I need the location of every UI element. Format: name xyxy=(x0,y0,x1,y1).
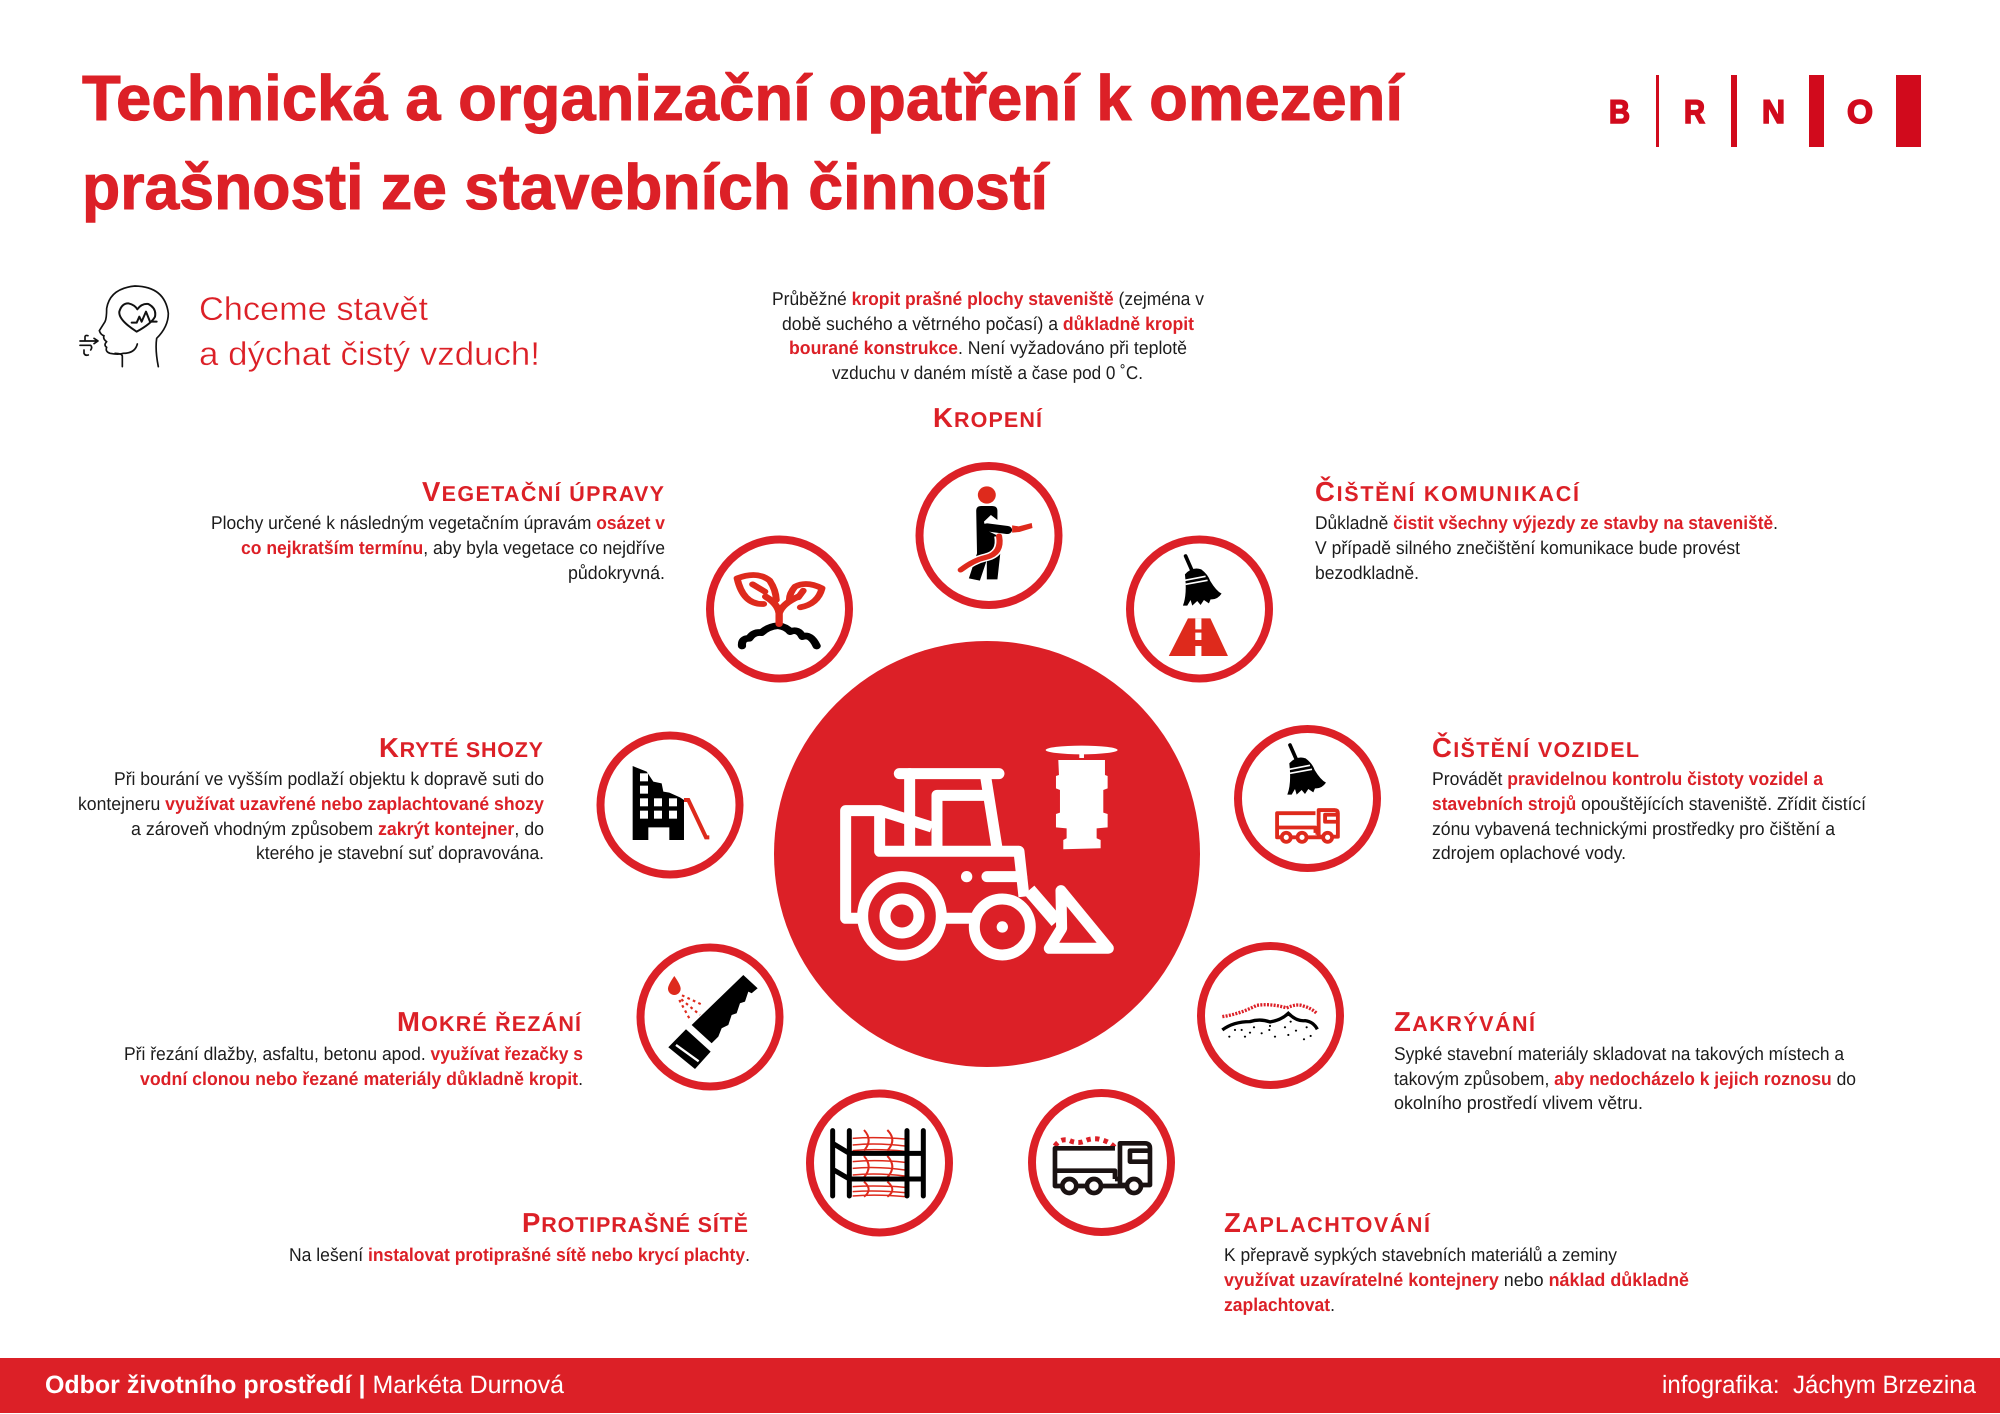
body text xyxy=(78,768,545,863)
heading: ZAKRÝVÁNÍ xyxy=(1394,1006,1536,1037)
body text: kterého je stavební suť dopravována. xyxy=(256,842,544,863)
body text xyxy=(1315,512,1778,583)
body text xyxy=(1394,1043,1856,1113)
panel: vegetační úpravy xyxy=(211,476,849,678)
footer: author: Odbor životního prostředí | Markéta Durnová xyxy=(45,1371,564,1399)
logo: Brno: O xyxy=(1847,93,1873,130)
icon: covered pile xyxy=(1201,946,1340,1085)
body text xyxy=(1224,1244,1689,1315)
icon: dust extractor xyxy=(1046,746,1118,849)
icon: broom and truck xyxy=(1238,729,1377,868)
body text: době suchého a větrného počasí) a důkladně kropit xyxy=(782,313,1194,334)
heading: ČIŠTĚNÍ KOMUNIKACÍ xyxy=(1315,476,1580,507)
body text xyxy=(1432,768,1867,863)
body text: vzduchu v daném místě a čase pod 0 ˚C. xyxy=(832,362,1143,383)
panel: zaplachtování xyxy=(1032,1093,1689,1315)
body text: Při bourání ve vyšším podlaží objektu k dopravě suti do xyxy=(114,768,544,789)
body text: zdrojem oplachové vody. xyxy=(1432,842,1626,863)
heading: KROPENÍ xyxy=(933,402,1043,433)
heading: MOKRÉ ŘEZÁNÍ xyxy=(397,1006,582,1037)
body text: Průběžné kropit prašné plochy staveniště (zejména v xyxy=(772,288,1205,309)
body text xyxy=(124,1043,583,1089)
body text: Na lešení instalovat protiprašné sítě nebo krycí plachty. xyxy=(289,1244,750,1265)
icon: building with chute xyxy=(600,736,740,874)
body text: Provádět pravidelnou kontrolu čistoty vozidel a xyxy=(1432,768,1824,789)
heading: ČIŠTĚNÍ VOZIDEL xyxy=(1432,732,1639,763)
body text xyxy=(772,288,1205,383)
panel: čištění vozidel xyxy=(1238,729,1867,868)
body text: Důkladně čistit všechny výjezdy ze stavby na staveniště. xyxy=(1315,512,1778,533)
title: prašnosti ze stavebních činností xyxy=(82,151,1050,223)
icon: seedling xyxy=(710,540,849,678)
panel: protiprašné sítě xyxy=(289,1094,949,1265)
body text xyxy=(211,512,666,583)
body text: co nejkratším termínu, aby byla vegetace co nejdříve xyxy=(241,537,665,558)
footer: credit: infografika: Jáchym Brzezina xyxy=(1662,1371,1976,1399)
body text: využívat uzavíratelné kontejnery nebo náklad důkladně xyxy=(1224,1269,1689,1290)
tagline: Chceme stavět xyxy=(199,290,428,327)
body text: Při řezání dlažby, asfaltu, betonu apod. využívat řezačky s xyxy=(124,1043,583,1064)
heading: PROTIPRAŠNÉ SÍTĚ xyxy=(522,1207,748,1238)
body text: bezodkladně. xyxy=(1315,562,1419,583)
body text: takovým způsobem, aby nedocházelo k jejich roznosu do xyxy=(1394,1068,1856,1089)
icon: scaffold with net xyxy=(810,1094,949,1232)
body text: vodní clonou nebo řezané materiály důkladně kropit. xyxy=(140,1068,583,1089)
logo: Brno: R xyxy=(1684,93,1705,130)
body text: půdokryvná. xyxy=(568,562,665,583)
tagline xyxy=(199,290,540,372)
body text: zónu vybavená technickými prostředky pro čištění a xyxy=(1432,818,1836,839)
heading: KRYTÉ SHOZY xyxy=(379,732,543,763)
body text: okolního prostředí vlivem větru. xyxy=(1394,1092,1643,1113)
body text: stavebních strojů opouštějících staveniště. Zřídit čistící xyxy=(1432,793,1867,814)
body text: kontejneru využívat uzavřené nebo zaplachtované shozy xyxy=(78,793,545,814)
footer bar xyxy=(0,1358,2000,1413)
title: Technická a organizační opatření k omezení xyxy=(82,62,1405,134)
body text: zaplachtovat. xyxy=(1224,1294,1335,1315)
heading: VEGETAČNÍ ÚPRAVY xyxy=(422,476,664,507)
body text: bourané konstrukce. Není vyžadováno při teplotě xyxy=(789,337,1187,358)
panel: kropení xyxy=(772,288,1205,605)
tagline: a dýchat čistý vzduch! xyxy=(199,335,540,372)
panel: čištění komunikací xyxy=(1130,476,1778,678)
heading: ZAPLACHTOVÁNÍ xyxy=(1224,1207,1431,1238)
body text: V případě silného znečištění komunikace bude provést xyxy=(1315,537,1740,558)
logo: Brno xyxy=(1609,75,1921,147)
logo: Brno: B xyxy=(1609,93,1630,130)
logo: Brno: N xyxy=(1762,93,1785,130)
body text: Plochy určené k následným vegetačním úpravám osázet v xyxy=(211,512,666,533)
body text: a zároveň vhodným způsobem zakrýt kontejner, do xyxy=(131,818,544,839)
icon: person with hose xyxy=(920,466,1058,605)
icon: broom and road xyxy=(1130,540,1269,678)
panel: zakrývání xyxy=(1201,946,1856,1113)
icon: wet saw xyxy=(640,948,780,1086)
icon: head with heart and breath xyxy=(80,286,168,367)
title xyxy=(82,62,1405,223)
icon: covered truck xyxy=(1032,1093,1171,1232)
panel: mokré řezání xyxy=(124,948,780,1089)
body text: Sypké stavební materiály skladovat na takových místech a xyxy=(1394,1043,1845,1064)
central circle with loader icon xyxy=(774,641,1200,1067)
icon: loader xyxy=(846,774,1108,955)
panel: kryté shozy xyxy=(78,732,740,874)
body text: K přepravě sypkých stavebních materiálů a zeminy xyxy=(1224,1244,1618,1265)
